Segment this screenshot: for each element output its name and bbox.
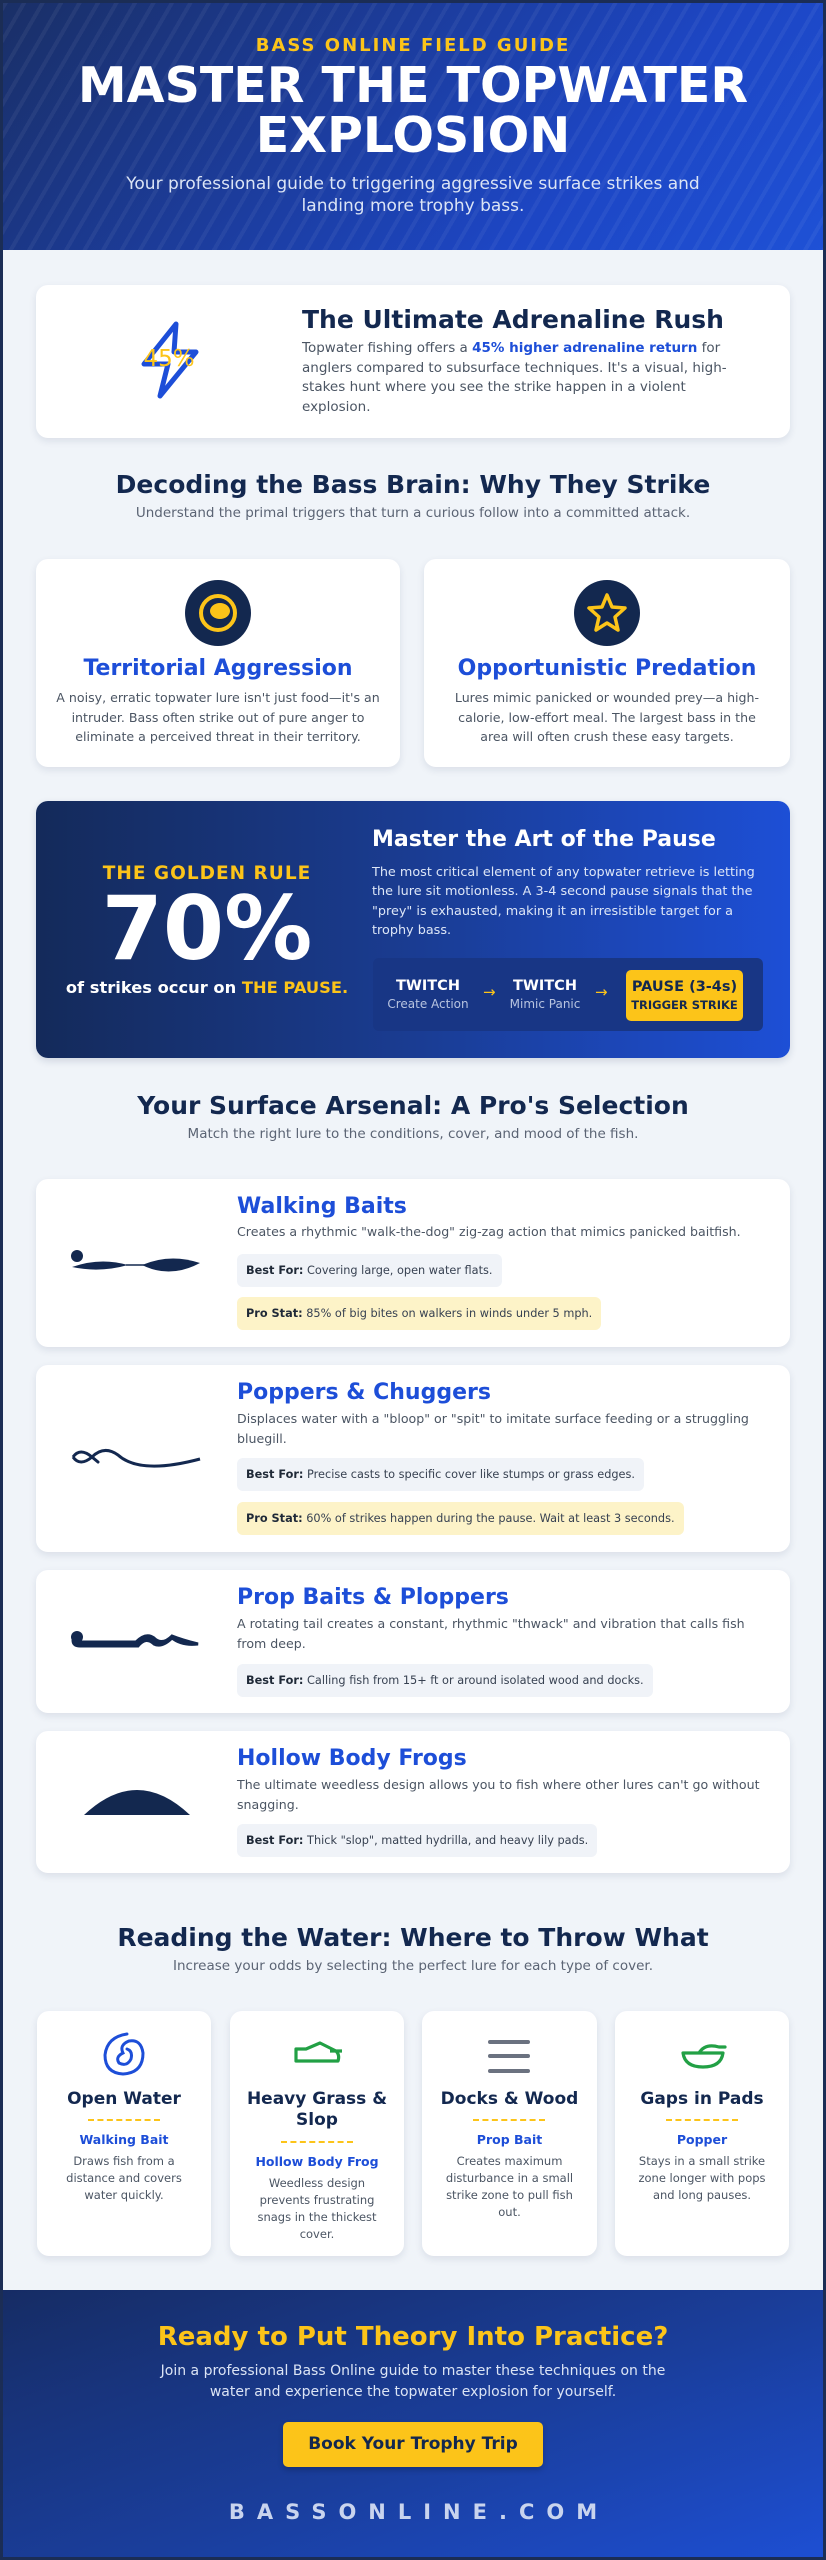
- lure card: poppers: Best For: Precise casts to specific cover like stumps or grass edges.: [246, 1468, 635, 1481]
- lure card: walking baits: Best For: Covering large, open water flats.: [246, 1264, 492, 1277]
- CTA text: water and experience the topwater explosion for yourself.: [210, 2384, 616, 2400]
- icon: swirl: [104, 2032, 144, 2076]
- icon: frog: [84, 1790, 190, 1815]
- flow: twitch twitch pause: TRIGGER STRIKE: [631, 998, 738, 1012]
- CTA text: [160, 2363, 665, 2400]
- title: MASTER THE TOPWATER: [78, 57, 748, 114]
- water card: open water: [37, 2011, 211, 2256]
- panel: golden rule: [36, 801, 790, 1058]
- section heading: arsenal: [137, 1091, 689, 1142]
- flow: twitch twitch pause: TWITCH: [396, 978, 460, 994]
- water card: docks: Prop Bait: [477, 2132, 542, 2147]
- icon: pad bowl: [681, 2044, 727, 2069]
- flow: twitch twitch pause: Create Action: [387, 997, 469, 1011]
- panel: opportunistic predation: [424, 559, 790, 767]
- icon: lightning 45%: [142, 322, 198, 398]
- lure card: prop baits: [36, 1570, 790, 1713]
- water card: docks: Docks & Wood: [441, 2089, 578, 2109]
- heading: The Ultimate Adrenaline Rush: [302, 305, 724, 334]
- stat: 70%: of strikes occur on THE PAUSE.: [66, 978, 348, 997]
- lure card: frogs: Hollow Body Frogs: [237, 1746, 467, 1771]
- water card: open water: Open Water: [67, 2089, 181, 2109]
- subtitle: [126, 174, 700, 216]
- icon: walking bait: [71, 1250, 200, 1272]
- icon: planks: [488, 2040, 530, 2073]
- lure card: walking baits: Creates a rhythmic "walk-the-dog" zig-zag action that mimics panicked baitfish.: [237, 1224, 741, 1239]
- lure card: frogs: The ultimate weedless design allows you to fish where other lures can't go without snagging.: [237, 1777, 760, 1812]
- panel: territorial aggression: [36, 559, 400, 767]
- icon: lightning 45%: 45%: [143, 346, 195, 372]
- subtitle: landing more trophy bass.: [302, 196, 524, 216]
- body: The most critical element of any topwater retrieve is letting the lure sit motionless. A 3-4 second pause signals that the "prey" is exhausted, making it an irresistible target for a trophy bass.: [372, 865, 755, 938]
- lure card: walking baits: Pro Stat: 85% of big bites on walkers in winds under 5 mph.: [246, 1307, 592, 1320]
- lure card: poppers: [36, 1365, 790, 1552]
- lure card: poppers: Pro Stat: 60% of strikes happen during the pause. Wait at least 3 seconds.: [246, 1512, 675, 1525]
- lure card: walking baits: Walking Baits: [237, 1194, 407, 1219]
- lure card: poppers: Poppers & Chuggers: [237, 1380, 491, 1405]
- section heading: arsenal: Your Surface Arsenal: A Pro's Selection: [137, 1091, 689, 1120]
- panel: opportunistic predation: Opportunistic Predation: [458, 656, 756, 681]
- lure card: frogs: [36, 1731, 790, 1873]
- flow: twitch twitch pause: →: [595, 983, 608, 1001]
- lure card: poppers: Displaces water with a "bloop" or "spit" to imitate surface feeding or a struggling bluegill.: [237, 1411, 749, 1446]
- water card: heavy grass: Slop: [296, 2110, 338, 2130]
- stat: 70%: [66, 863, 348, 997]
- icon: target: [185, 580, 251, 646]
- header: [0, 0, 826, 250]
- section heading: reading the water: Reading the Water: Where to Throw What: [117, 1923, 709, 1952]
- flow: twitch twitch pause: [373, 958, 763, 1031]
- flow: twitch twitch pause: TWITCH: [513, 978, 577, 994]
- lure card: prop baits: Prop Baits & Ploppers: [237, 1585, 509, 1610]
- brand: BASSONLINE.COM: [229, 2500, 609, 2524]
- water card: heavy grass: [230, 2011, 404, 2256]
- water card: open water: Draws fish from a distance and covers water quickly.: [66, 2154, 182, 2202]
- footer CTA: [0, 2290, 826, 2560]
- button: [283, 2422, 543, 2467]
- section heading: decoding: Decoding the Bass Brain: Why They Strike: [116, 470, 710, 499]
- flow: twitch twitch pause: →: [483, 983, 496, 1001]
- water card: docks: Creates maximum disturbance in a small strike zone to pull fish out.: [446, 2154, 573, 2219]
- title: EXPLOSION: [256, 107, 570, 164]
- stat: 70%: THE GOLDEN RULE: [103, 863, 311, 884]
- water card: heavy grass: Weedless design prevents frustrating snags in the thickest cover.: [257, 2176, 377, 2241]
- panel: territorial aggression: Territorial Aggression: [83, 656, 353, 681]
- water card: open water: Walking Bait: [79, 2132, 169, 2147]
- icon: star: [574, 580, 640, 646]
- icon: prop bait: [71, 1631, 198, 1648]
- card: adrenaline rush: [36, 285, 790, 438]
- body text: Topwater fishing offers a 45% higher adrenaline return for anglers compared to subsurface techniques. It's a visual, high-stakes hunt where you see the strike happen in a violent explosion.: [302, 340, 727, 414]
- section heading: decoding: Understand the primal triggers that turn a curious follow into a committed attack.: [136, 505, 690, 521]
- flow: twitch twitch pause: Mimic Panic: [510, 997, 580, 1011]
- water card: pads: Gaps in Pads: [640, 2089, 764, 2109]
- panel: territorial aggression: A noisy, erratic topwater lure isn't just food—it's an intruder. Bass often strike out of pure anger to eliminate a perceived threat in their territory.: [56, 690, 380, 744]
- section heading: reading the water: Increase your odds by selecting the perfect lure for each type of cover.: [173, 1958, 653, 1974]
- title: [78, 57, 748, 164]
- water card: heavy grass: Heavy Grass &: [247, 2089, 387, 2109]
- water card: heavy grass: Hollow Body Frog: [255, 2154, 379, 2169]
- subtitle: Your professional guide to triggering aggressive surface strikes and: [126, 174, 700, 194]
- water card: pads: [615, 2011, 789, 2256]
- heading: art of pause: Master the Art of the Pause: [372, 827, 716, 852]
- section heading: decoding: [116, 470, 710, 521]
- stat: 70%: 70%: [102, 877, 312, 980]
- panel: opportunistic predation: Lures mimic panicked or wounded prey—a high-calorie, low-effort meal. The largest bass in the area will often crush these easy targets.: [455, 690, 759, 744]
- water card: pads: Popper: [677, 2132, 727, 2147]
- water card: pads: Stays in a small strike zone longer with pops and long pauses.: [638, 2154, 766, 2202]
- lure card: prop baits: Best For: Calling fish from 15+ ft or around isolated wood and docks.: [246, 1674, 644, 1687]
- lure card: prop baits: A rotating tail creates a constant, rhythmic "thwack" and vibration that calls fish from deep.: [237, 1616, 745, 1650]
- eyebrow: BASS ONLINE FIELD GUIDE: [256, 35, 570, 56]
- section heading: arsenal: Match the right lure to the conditions, cover, and mood of the fish.: [188, 1126, 638, 1142]
- lure card: frogs: Best For: Thick "slop", matted hydrilla, and heavy lily pads.: [246, 1834, 588, 1847]
- icon: grass boat: [294, 2041, 342, 2063]
- flow: twitch twitch pause: PAUSE (3-4s): [632, 979, 737, 995]
- button: Book Your Trophy Trip: [308, 2434, 518, 2454]
- water card: docks: [422, 2011, 597, 2256]
- section heading: reading the water: [117, 1923, 709, 1974]
- CTA heading: Ready to Put Theory Into Practice?: [158, 2322, 668, 2352]
- CTA text: Join a professional Bass Online guide to master these techniques on the: [161, 2363, 665, 2379]
- lure card: walking baits: [36, 1179, 790, 1347]
- icon: popper: [72, 1448, 200, 1468]
